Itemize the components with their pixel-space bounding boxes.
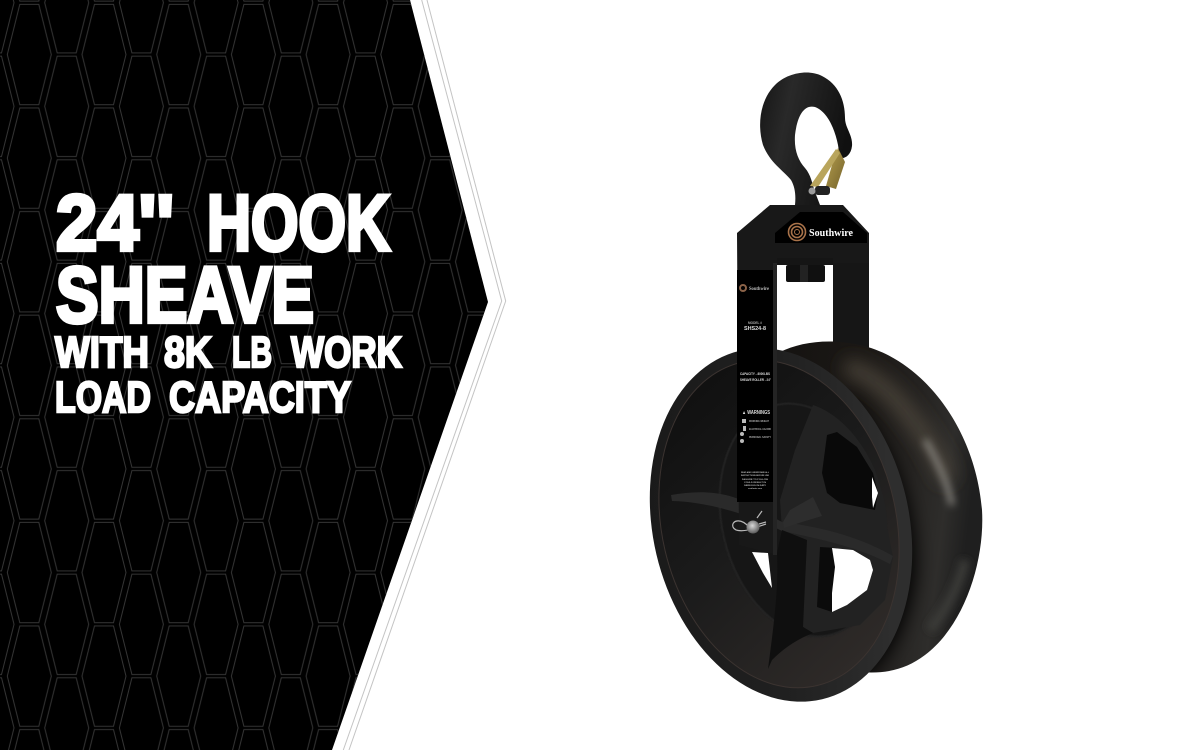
- subtitle line 1: [55, 328, 402, 377]
- subtitle line 2: [55, 373, 351, 422]
- subtitle line 1: WITH: [55, 328, 149, 377]
- strap warning rows: [749, 420, 771, 439]
- strap footer text: FAILURE TO FOLLOW: [742, 478, 769, 481]
- front flange: [615, 321, 947, 729]
- horizontal spoke: [671, 492, 893, 564]
- lower window frame: [817, 547, 837, 612]
- yoke logo mark: [788, 224, 806, 240]
- strap model number: SHS24-8: [744, 326, 766, 332]
- product: hook sheave: [650, 72, 982, 702]
- title line 1: 24'': [56, 178, 174, 267]
- strap warning rows: WORKING WEIGHT: [749, 420, 769, 423]
- hook body: [760, 73, 852, 205]
- subtitle line 1: 8K: [164, 328, 212, 377]
- upper window opening: [822, 432, 878, 510]
- strap warning rows: ELECTRICAL HAZARD: [749, 428, 771, 431]
- strap footer text: READ AND UNDERSTAND ALL: [741, 471, 770, 474]
- lower right window opening: [832, 548, 873, 612]
- strap warning icons: [740, 419, 746, 443]
- upper right gap: [872, 477, 878, 508]
- yoke top and left arm: [737, 205, 869, 555]
- yoke logo text: Southwire: [809, 228, 853, 239]
- yoke right arm: [833, 233, 869, 365]
- strap roller size: SHEAVE ROLLER - 24": [740, 378, 771, 382]
- strap footer text: southwire.com: [748, 487, 762, 490]
- subtitle line 2: LOAD: [55, 373, 151, 422]
- strap logo: [740, 285, 746, 291]
- flange inner dish: [627, 336, 931, 712]
- strap brand: Southwire: [749, 287, 770, 292]
- hub: [783, 497, 822, 528]
- yoke black label: [775, 212, 867, 243]
- subtitle line 1: WORK: [291, 328, 402, 377]
- rear flange and drum: [780, 341, 982, 680]
- strap capacity: CAPACITY - 8000LBS: [740, 372, 770, 376]
- strap footer text: [741, 471, 770, 490]
- lower left gap: [752, 552, 772, 588]
- inner hub ring: [697, 387, 909, 653]
- spoke frames: [780, 405, 893, 633]
- chevron outline lines: [343, 0, 506, 750]
- strap footer text: COULD RESULT IN: [744, 482, 766, 484]
- strap footer text: INSTRUCTIONS BEFORE USE: [741, 475, 769, 477]
- title line 1: [56, 178, 390, 267]
- strap model: MODEL #: [748, 321, 762, 325]
- axle pin and clip: [733, 511, 766, 534]
- strap warnings heading: ▲ WARNINGS: [742, 410, 771, 416]
- subtitle line 1: LB: [232, 328, 272, 377]
- title line 2: SHEAVE: [56, 250, 314, 339]
- title line 1: HOOK: [207, 178, 390, 267]
- center bearing: [777, 258, 833, 282]
- hook latch: [808, 148, 845, 195]
- title: [55, 178, 402, 422]
- strap warning rows: PERSONAL SAFETY: [749, 436, 771, 439]
- panel: black chevron with hexagon pattern: [0, 0, 488, 750]
- strap footer text: SERIOUS INJURY: [744, 485, 767, 487]
- vertical spoke: [768, 530, 813, 669]
- hanging label strap: [737, 263, 777, 555]
- subtitle line 2: CAPACITY: [169, 373, 351, 422]
